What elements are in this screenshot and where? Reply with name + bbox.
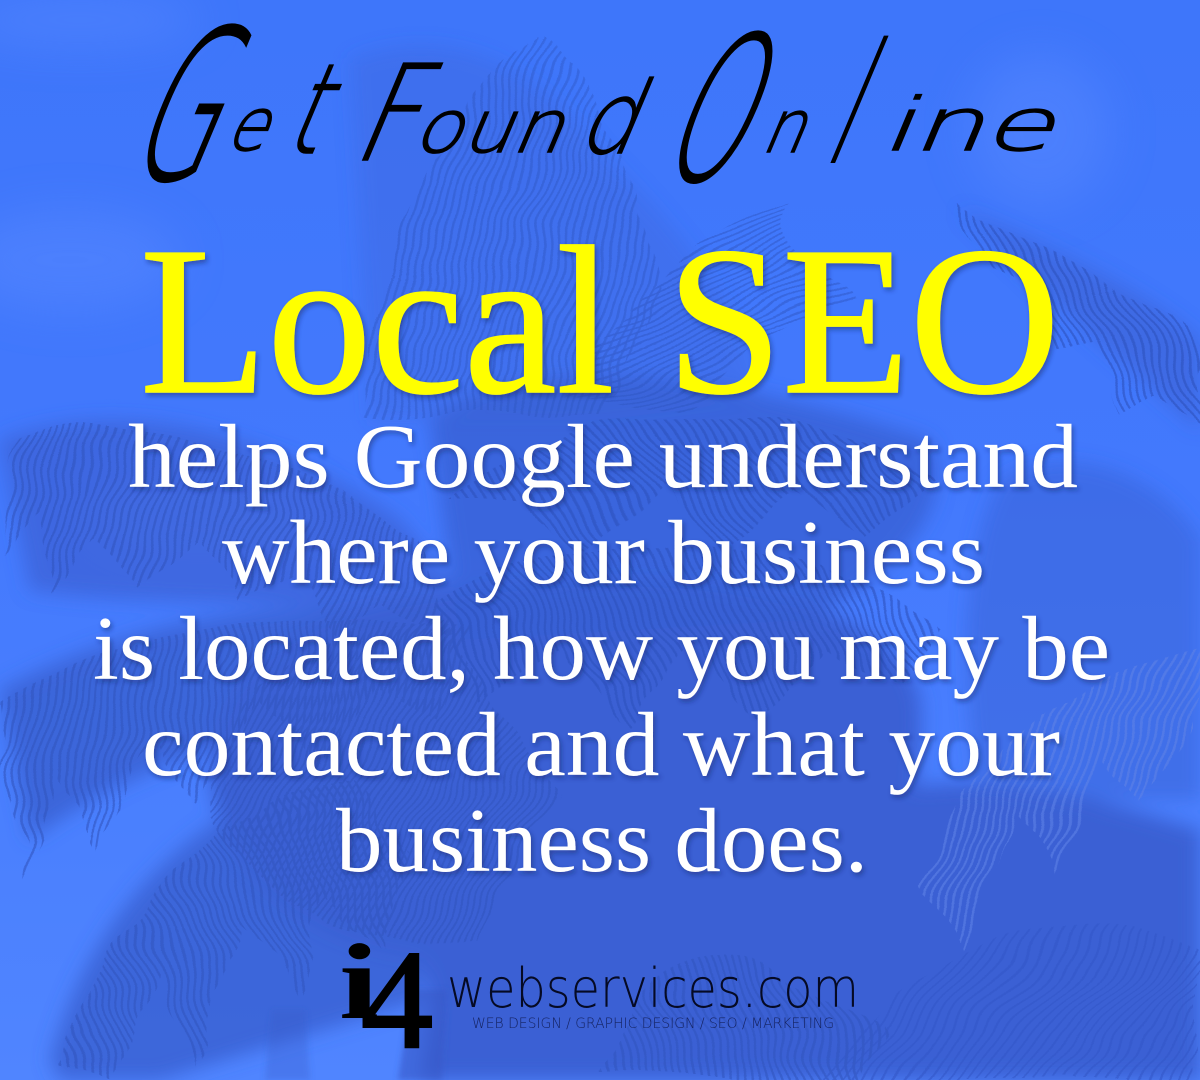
title: Get Found Online: t	[270, 37, 365, 183]
title: Get Found Online: ine	[873, 83, 1079, 168]
palm trunks	[265, 990, 447, 1080]
title: Get Found Online: F	[336, 36, 463, 191]
background: clouds	[0, 0, 1110, 565]
logo mark: i4: i	[339, 923, 379, 1042]
heading: Local SEO: Local SEO	[140, 203, 1060, 438]
body text: contacted and what your	[142, 694, 1060, 795]
body text	[93, 406, 1110, 891]
body text: where your business	[222, 502, 985, 603]
title: Get Found Online: oun	[404, 85, 588, 170]
logo tagline: WEB DESIGN / GRAPHIC DESIGN / SEO / MARKETING	[472, 1016, 834, 1032]
title: Get Found Online: l	[806, 9, 909, 201]
logo mark: i4: 4	[361, 922, 433, 1078]
title: Get Found Online	[102, 0, 1079, 229]
body text: business does.	[336, 790, 868, 891]
title: Get Found Online: n	[752, 85, 830, 170]
body text: helps Google understand	[128, 406, 1078, 507]
logo wordmark: webservices.com	[447, 957, 859, 1020]
body text: is located, how you may be	[93, 598, 1110, 699]
title: Get Found Online: O	[636, 0, 813, 227]
title: Get Found Online: e	[217, 83, 293, 168]
logo: i4 webservices.com	[339, 922, 859, 1078]
title: Get Found Online: d	[565, 61, 671, 177]
